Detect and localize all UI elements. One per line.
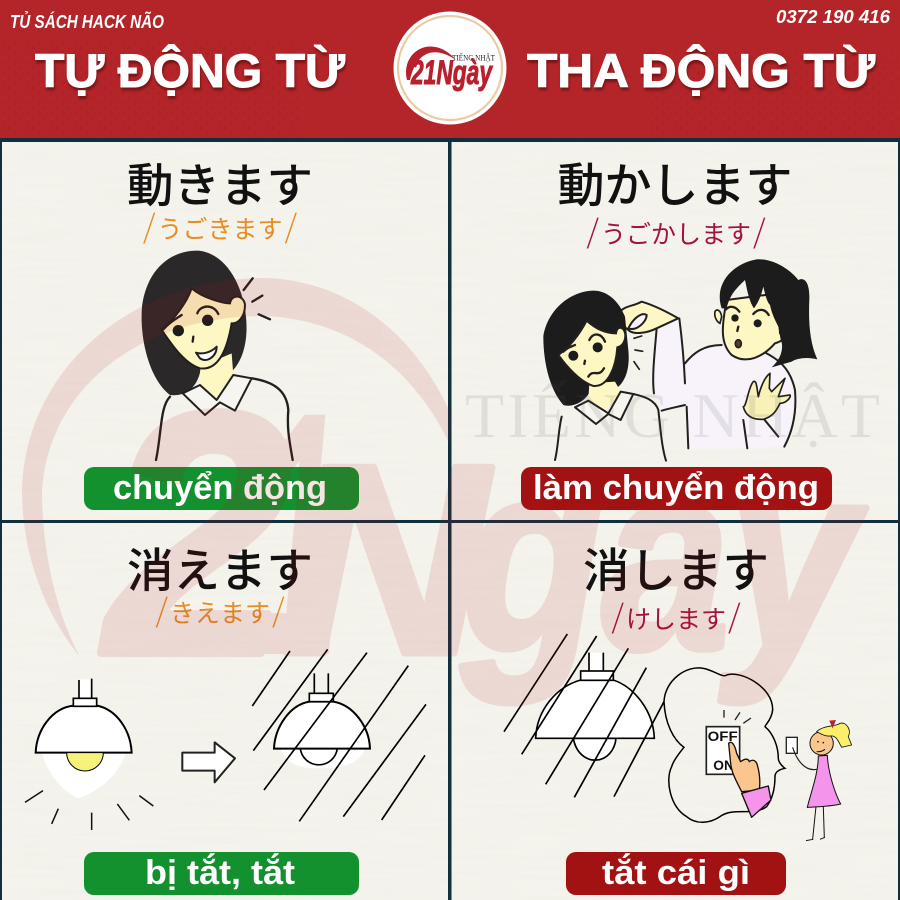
watermark logo: 2 bbox=[101, 342, 291, 727]
illustration: lamp on then off bbox=[25, 649, 426, 830]
lamp with strike lines bbox=[504, 634, 664, 797]
kanji word: 消えます bbox=[127, 545, 313, 597]
label pill: chuyển động bbox=[113, 469, 327, 507]
panel: bottom right bbox=[504, 545, 852, 895]
seated woman bbox=[543, 291, 666, 461]
phone number: 0372 190 416 bbox=[776, 7, 891, 27]
light switch bbox=[706, 710, 751, 774]
light switch: ON bbox=[713, 757, 734, 773]
reading: /きえます/ bbox=[155, 586, 285, 632]
label pill: tắt cái gì bbox=[602, 854, 750, 892]
illustration: turning the lamp off bbox=[504, 634, 852, 841]
light switch: OFF bbox=[708, 728, 738, 744]
panel: top right bbox=[521, 159, 832, 510]
illustration: woman bbox=[142, 251, 293, 460]
label pill bbox=[566, 852, 786, 895]
center logo bbox=[394, 12, 506, 124]
watermark logo: 1 bbox=[255, 342, 340, 727]
label pill bbox=[84, 467, 359, 510]
panel: bottom left bbox=[25, 545, 426, 895]
reading: /けします/ bbox=[611, 592, 741, 638]
label pill: làm chuyển động bbox=[533, 469, 819, 507]
watermark logo: N bbox=[282, 410, 495, 711]
heading: right: THA ĐỘNG TỪ bbox=[527, 44, 875, 97]
pointing hand bbox=[729, 742, 771, 817]
center logo: 21Ngày bbox=[410, 54, 493, 92]
thought bubble bbox=[664, 668, 785, 822]
watermark logo bbox=[22, 278, 869, 727]
label pill bbox=[84, 852, 359, 895]
reading: /うごかします/ bbox=[586, 207, 766, 253]
kanji word: 消します bbox=[583, 545, 769, 597]
watermark wordmark: TIẾNG NHẬT bbox=[465, 380, 880, 451]
panel: top left bbox=[84, 160, 359, 510]
lit lamp bbox=[25, 679, 153, 830]
heading: left: TỰ ĐỘNG TỪ bbox=[35, 44, 345, 97]
kanji word: 動きます bbox=[127, 160, 313, 212]
center logo: TIẾNG NHẬT bbox=[452, 52, 495, 62]
arrow bbox=[182, 742, 235, 782]
reading: /うごきます/ bbox=[143, 202, 298, 248]
girl at switch bbox=[786, 720, 852, 841]
unlit lamp with strike lines bbox=[252, 649, 426, 821]
standing woman bbox=[617, 259, 817, 448]
publisher label: TỦ SÁCH HACK NÃO bbox=[10, 11, 164, 32]
label pill: bị tắt, tắt bbox=[145, 854, 295, 892]
kanji word: 動かします bbox=[558, 159, 792, 212]
header banner bbox=[0, 0, 900, 138]
illustration: two women bbox=[543, 259, 817, 461]
